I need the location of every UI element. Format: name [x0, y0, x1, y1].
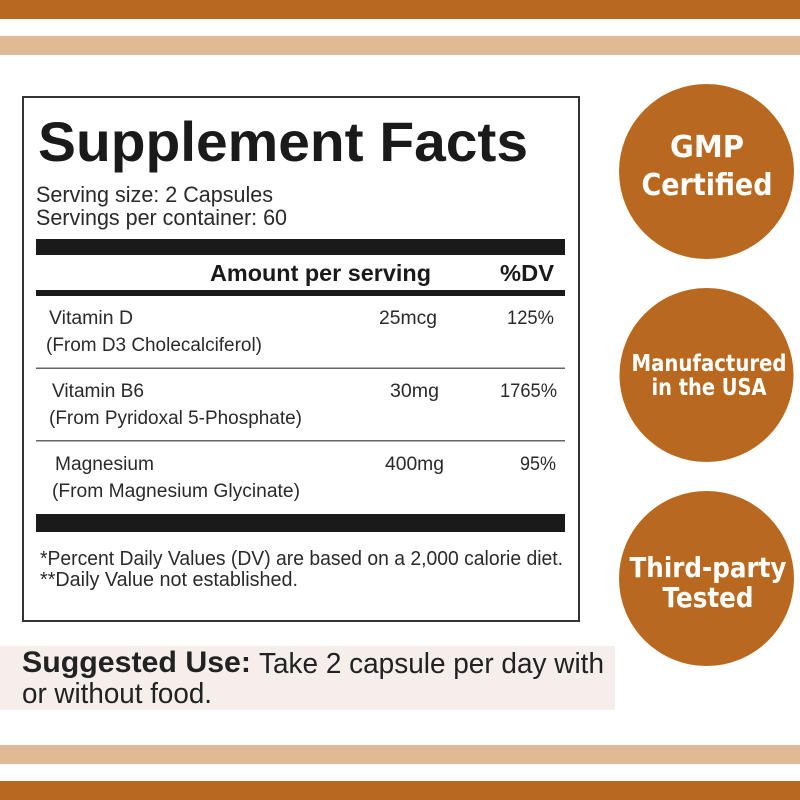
serving information: Serving size: 2 Capsules [36, 182, 273, 207]
header rule [36, 290, 565, 296]
row: Vitamin B6: (From Pyridoxal 5-Phosphate) [49, 408, 302, 429]
suggested use text: Take 2 capsule per day with [259, 648, 604, 680]
row: Magnesium: 400mg [385, 454, 444, 475]
panel: supplement facts label [23, 97, 579, 621]
footnotes [40, 548, 563, 591]
suggested use text: Suggested Use: [22, 646, 251, 679]
row: Vitamin B6: 1765% [500, 381, 557, 402]
top black bar [36, 239, 565, 255]
heading: Supplement Facts: Supplement Facts [38, 110, 528, 173]
row: Vitamin D: 25mcg [379, 308, 437, 329]
row: Vitamin D: 125% [507, 308, 554, 329]
badge: Third-party Tested [619, 491, 794, 666]
table header [210, 260, 555, 286]
bottom decorative bands [0, 745, 800, 800]
suggested use text: or without food. [22, 678, 212, 710]
row: Magnesium: (From Magnesium Glycinate) [52, 481, 300, 502]
row: Vitamin D [46, 308, 554, 356]
panel: suggested use [0, 646, 615, 710]
row: Magnesium: 95% [520, 454, 556, 475]
row: Vitamin B6: 30mg [390, 381, 439, 402]
badge: Manufactured in the USA [620, 288, 794, 462]
badge: GMP Certified: GMP [670, 130, 744, 165]
row: Vitamin B6 [49, 381, 557, 429]
row: Magnesium: Magnesium [55, 454, 154, 475]
badge: GMP Certified [619, 84, 794, 259]
serving information [36, 182, 287, 230]
row: Vitamin B6: Vitamin B6 [52, 381, 144, 402]
table header: %DV [500, 260, 555, 286]
row: Vitamin D: Vitamin D [49, 308, 133, 329]
badge: Manufactured in the USA: in the USA [652, 375, 767, 401]
badge: Third-party Tested: Tested [662, 581, 754, 614]
row: Magnesium [52, 454, 556, 502]
serving information: Servings per container: 60 [36, 205, 287, 230]
top decorative bands [0, 0, 800, 55]
badge: GMP Certified: Certified [642, 168, 772, 203]
bottom black bar [36, 514, 565, 532]
row: Vitamin D: (From D3 Cholecalciferol) [46, 335, 262, 356]
table header: Amount per serving [210, 260, 431, 286]
footnotes: **Daily Value not established. [40, 569, 298, 591]
footnotes: *Percent Daily Values (DV) are based on a 2,000 calorie diet. [40, 548, 563, 570]
suggested use text [22, 646, 604, 710]
